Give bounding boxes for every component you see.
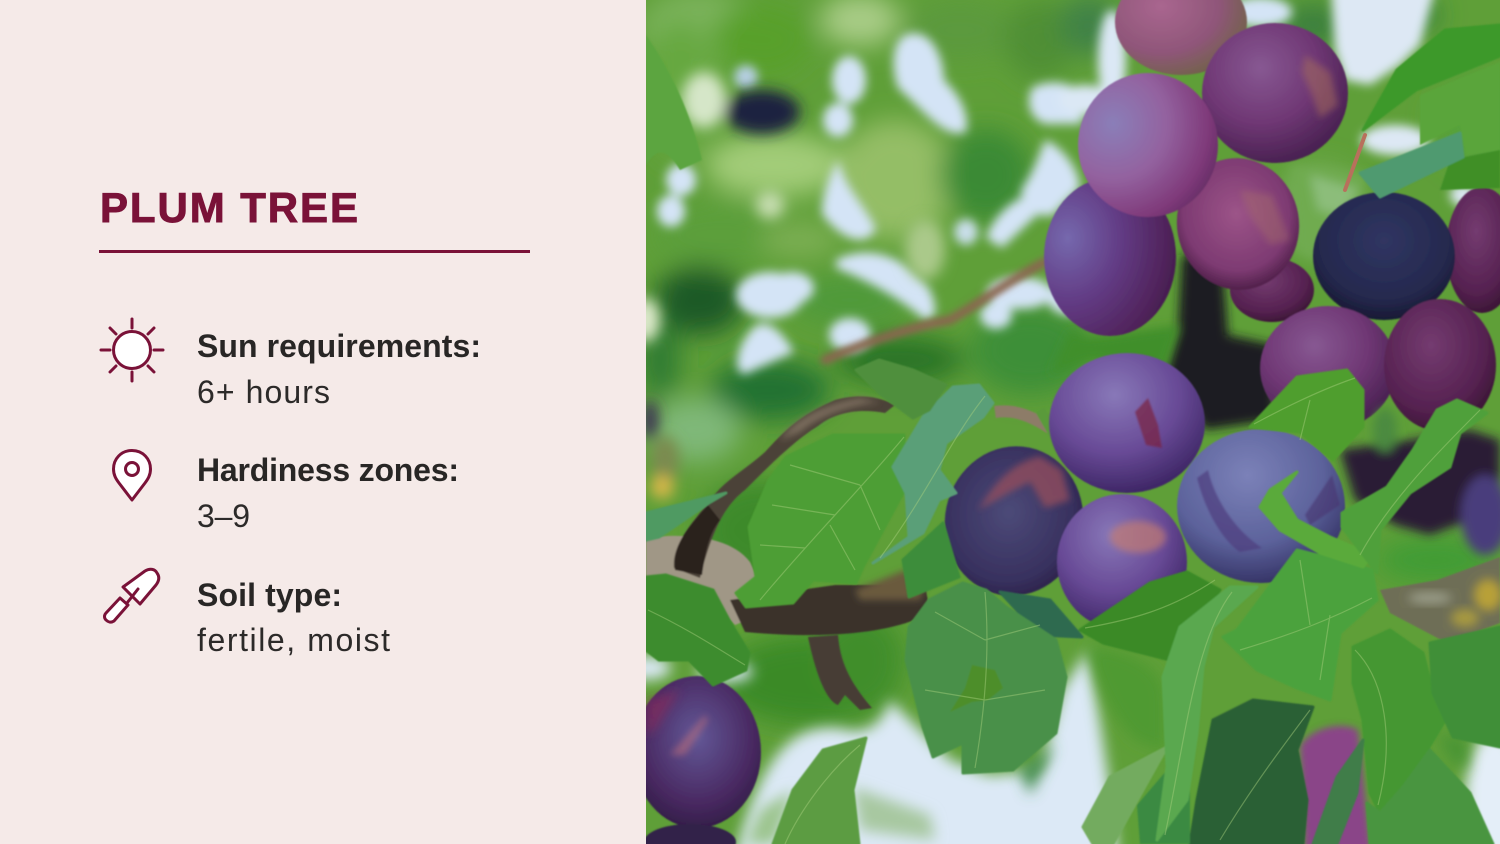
- branch: dark underside: [730, 585, 930, 635]
- leaf: small left teal: [646, 493, 726, 540]
- twig to leaf: [995, 411, 1050, 428]
- leaf: top right lower: [1440, 150, 1500, 190]
- leaf: curled: [1260, 472, 1372, 567]
- leaf: bottom left: [773, 738, 866, 844]
- plum: lavender: [1078, 73, 1218, 217]
- main branch: [646, 396, 1500, 710]
- photo: plum tree branch: [621, 0, 1500, 844]
- sky gaps through foliage: [657, 0, 1476, 374]
- leaf: lower centre: [906, 583, 1066, 773]
- dark central branch: [1165, 255, 1275, 430]
- leaf: under cluster: [903, 523, 959, 597]
- plum: bottom right pink: [1300, 726, 1372, 844]
- leaf stems: [1345, 135, 1365, 190]
- icon: sun: [101, 319, 163, 381]
- text: soil type: Soil type:: [197, 577, 342, 613]
- plum: lavender lower: [1057, 494, 1187, 630]
- plum: dark right: [1384, 299, 1496, 431]
- middle plum cluster: [931, 353, 1345, 630]
- leaf: long right: [1342, 400, 1487, 573]
- text: sun requirements: [197, 328, 481, 410]
- plum: bottom left: [633, 676, 761, 828]
- plum: navy: [1313, 192, 1455, 320]
- text: hardiness zones: 3–9: [197, 498, 250, 534]
- branch: pale bark: [646, 535, 755, 626]
- plum: mottled: [1176, 157, 1300, 290]
- blurred pale and dark patches: [632, 72, 945, 499]
- leaf: right of centre: [1080, 572, 1220, 660]
- text: sun requirements: Sun requirements:: [197, 328, 481, 364]
- branch: rough top: [855, 570, 925, 600]
- leaf: left centre: [736, 435, 904, 607]
- branch: upper limb: [674, 396, 895, 578]
- leaf: top right: [1363, 25, 1500, 130]
- bright leaves behind cluster: [1050, 165, 1370, 375]
- leaf: long upright: [1157, 587, 1257, 840]
- lower plums: [633, 676, 1372, 844]
- leaf: left edge: [646, 575, 749, 685]
- leaf: pale bottom: [1083, 747, 1167, 844]
- plum: far right: [1446, 187, 1500, 313]
- leaf veins: [648, 378, 1480, 844]
- text: hardiness zones: [197, 452, 459, 534]
- plum: mid right: [1260, 306, 1396, 430]
- icon: location pin: [114, 450, 150, 500]
- text: soil type: [197, 577, 390, 658]
- leaf: top right lighter: [1420, 62, 1500, 155]
- text: sun requirements: 6+ hours: [197, 374, 330, 410]
- upper plum cluster: [1044, 0, 1500, 431]
- plum: red slate: [944, 445, 1084, 596]
- blurred foliage background: [640, 0, 1500, 725]
- leaf: upper right of cluster: [1250, 370, 1363, 460]
- twig: lower stub: [808, 635, 872, 710]
- leaf: teal top right: [1360, 133, 1463, 197]
- branch: lichen: [1380, 557, 1500, 643]
- blurred dark plums right: [1340, 408, 1500, 555]
- plum: rose top right: [1202, 23, 1348, 163]
- heading rule: [99, 250, 530, 253]
- leaf: lower right: [1353, 630, 1447, 813]
- leaf notch: [950, 665, 1003, 712]
- heading: plum tree: PLUM TREE: [100, 184, 358, 231]
- leaf: centre right: [1223, 550, 1377, 700]
- text: hardiness zones: Hardiness zones:: [197, 452, 459, 488]
- leaf: dark lower: [1190, 700, 1313, 844]
- plum: blue: [1177, 429, 1345, 583]
- plum: top: [1115, 0, 1247, 75]
- leaf: top left: [646, 35, 702, 170]
- foreground leaves: [646, 25, 1500, 844]
- leaf: narrow teal centre: [873, 385, 993, 563]
- leaf: small upper: [856, 360, 946, 418]
- lower sky: [621, 650, 1500, 844]
- plum: upper middle: [1049, 353, 1205, 493]
- leaf: dark teal under: [1000, 592, 1082, 637]
- plum: left tall: [1044, 178, 1176, 336]
- icon: garden trowel: [104, 569, 159, 622]
- leaf: far right: [1430, 627, 1500, 747]
- leaf: lower right bottom: [1367, 750, 1493, 844]
- text: soil type: fertile, moist: [197, 622, 390, 658]
- blurred leaves near sky: [745, 645, 1467, 844]
- background twig: [825, 262, 1045, 360]
- leaf: narrow dark: [1313, 740, 1363, 844]
- leaf: behind upright: [1137, 770, 1190, 844]
- panel: left text background: [0, 0, 646, 844]
- plum: small behind: [1230, 258, 1314, 322]
